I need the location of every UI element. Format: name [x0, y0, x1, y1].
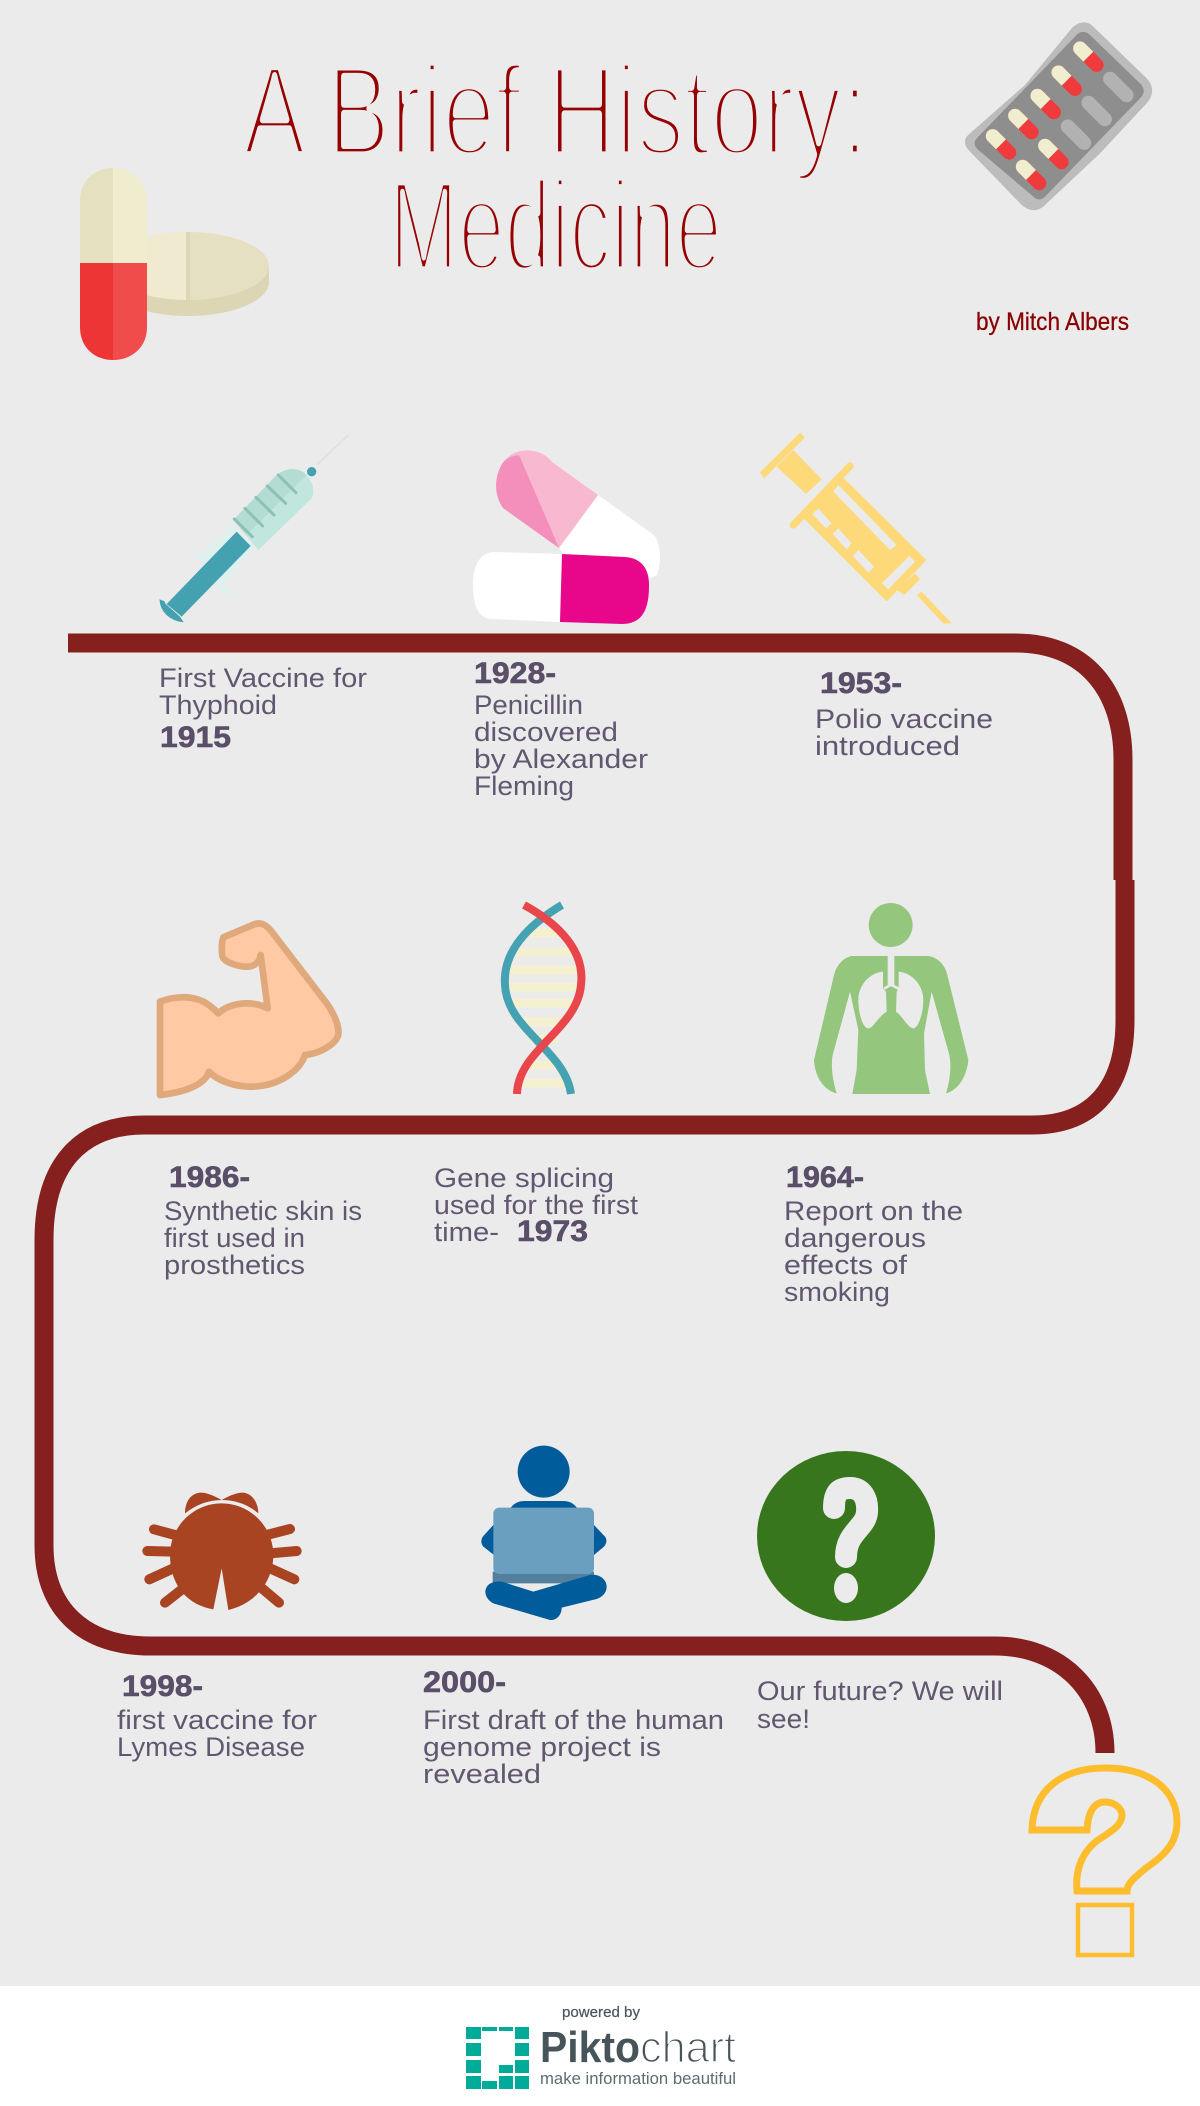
label: future — [757, 1676, 1003, 1734]
label: 1915 — [159, 663, 367, 754]
label: 1986: Synthetic skin is — [164, 1196, 362, 1226]
icon: blister pack — [965, 22, 1152, 210]
icon: green question mark circle — [757, 1451, 935, 1621]
icon: teal syringe — [160, 435, 348, 622]
label: 1928: Penicillin — [474, 690, 583, 720]
label: 1953 — [815, 667, 993, 761]
title: Medicine — [389, 155, 722, 298]
icon: body with lungs — [814, 903, 968, 1094]
label: 1973: Gene splicing — [434, 1163, 614, 1193]
label: 1928: discovered — [474, 717, 618, 747]
label: 1928 — [474, 657, 648, 801]
label: 1998: first vaccine for — [117, 1705, 317, 1735]
label: 1915: First Vaccine for — [159, 663, 367, 693]
timeline path — [44, 643, 1125, 1753]
label: 1964: smoking — [784, 1277, 890, 1307]
label: 1928: by Alexander — [474, 744, 648, 774]
label: 1915: Thyphoid — [159, 690, 277, 720]
label: future: see! — [757, 1704, 810, 1734]
label: 2000: genome project is — [423, 1732, 661, 1762]
label: 1964: Report on the — [784, 1196, 963, 1226]
label: 1964: 1964- — [786, 1161, 864, 1194]
label: 1964: dangerous — [784, 1223, 926, 1253]
label: 1928: Fleming — [474, 771, 574, 801]
label: 1928: 1928- — [474, 657, 556, 690]
label: 1998: Lymes Disease — [117, 1732, 305, 1762]
piktochart wordmark: chart — [640, 2023, 736, 2072]
footer band — [0, 1986, 1200, 2106]
icon: person with laptop — [481, 1446, 607, 1620]
label: 1998 — [117, 1670, 317, 1762]
label: 1953: Polio vaccine — [815, 704, 993, 734]
icon: open pink capsule — [473, 450, 660, 624]
label: 1964 — [784, 1161, 963, 1307]
author byline: by Mitch Albers — [976, 308, 1129, 336]
icon: flexed arm — [160, 923, 338, 1095]
label: 2000: First draft of the human — [423, 1705, 724, 1735]
label: 1973: 1973 — [517, 1215, 588, 1248]
label: 1953: 1953- — [820, 667, 902, 700]
label: 2000: 2000- — [423, 1666, 506, 1699]
label: 1998: 1998- — [122, 1670, 203, 1703]
label: 1973: used for the first — [434, 1190, 639, 1220]
label: 1986 — [164, 1161, 362, 1280]
piktochart logo mark — [466, 2027, 529, 2089]
label: 1986: prosthetics — [164, 1250, 305, 1280]
piktochart wordmark: Pikto — [540, 2023, 640, 2072]
title — [243, 40, 868, 298]
piktochart wordmark: make information beautiful — [540, 2069, 736, 2088]
label: 1915: 1915 — [160, 721, 231, 754]
icon: DNA helix — [505, 905, 582, 1094]
label: 1986: 1986- — [169, 1161, 250, 1194]
powered by: powered by — [562, 2004, 640, 2021]
icon: yellow syringe — [760, 433, 952, 623]
label: 1986: first used in — [164, 1223, 305, 1253]
label: 1973 — [434, 1163, 639, 1248]
label: 1964: effects of — [784, 1250, 908, 1280]
piktochart wordmark — [540, 2023, 736, 2088]
icon: capsule and tablet — [80, 168, 269, 360]
label: 1973: time- — [434, 1217, 499, 1247]
icon: yellow outlined question mark — [1032, 1768, 1177, 1955]
label: 2000: revealed — [423, 1759, 541, 1789]
title: A Brief History: — [243, 40, 868, 183]
label: future: Our future? We will — [757, 1676, 1003, 1706]
icon: tick — [147, 1493, 297, 1610]
label: 1953: introduced — [815, 731, 960, 761]
label: 2000 — [423, 1666, 724, 1789]
